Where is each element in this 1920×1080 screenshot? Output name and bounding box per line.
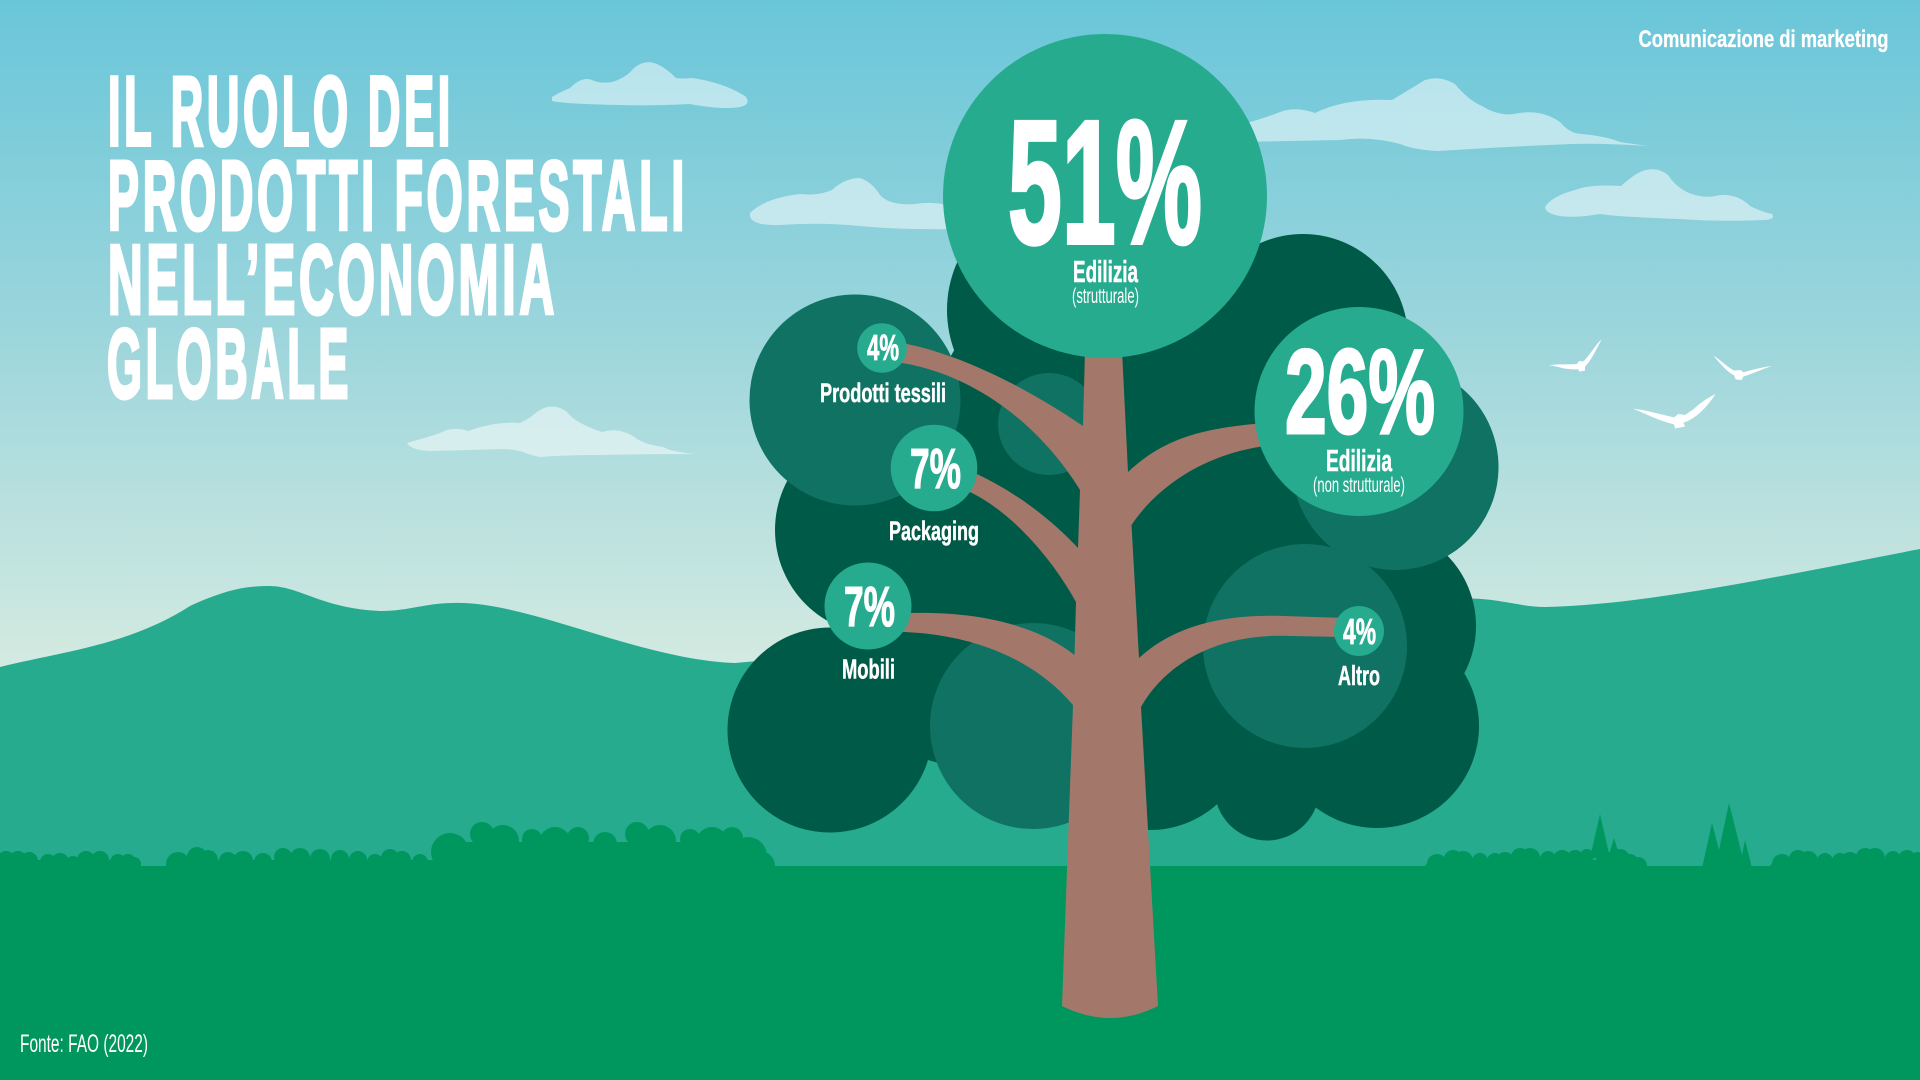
data node: 4% Altro: 4% xyxy=(1343,611,1376,652)
data node: 7% Packaging: Packaging xyxy=(889,516,979,546)
data node: 4% Altro: Altro xyxy=(1338,660,1380,691)
title xyxy=(107,56,688,418)
data node: 7% Packaging: 7% xyxy=(910,437,961,501)
data node: 7% Mobili: 7% xyxy=(844,575,895,639)
ground xyxy=(0,866,1920,1080)
data node: 51% Edilizia strutturale: (strutturale) xyxy=(1072,285,1139,308)
data node: 51% Edilizia strutturale xyxy=(943,34,1267,358)
hills xyxy=(0,549,1920,880)
data node: 4% Prodotti tessili: 4% xyxy=(867,327,899,368)
data node: 7% Packaging xyxy=(889,425,979,546)
data node: 51% Edilizia strutturale: 51% xyxy=(1008,85,1202,281)
data node: 4% Prodotti tessili: Prodotti tessili xyxy=(820,378,946,408)
data node: 4% Altro xyxy=(1334,606,1384,691)
clouds xyxy=(407,62,1773,457)
data node: 26% Edilizia non strutturale: (non strutturale) xyxy=(1313,474,1405,497)
source: Fonte: FAO (2022) xyxy=(20,1030,148,1058)
title: IL RUOLO DEI xyxy=(108,56,454,166)
title: GLOBALE xyxy=(107,308,352,418)
data node: 7% Mobili xyxy=(824,562,912,684)
tree trunk and branches xyxy=(895,342,1345,1018)
data node: 26% Edilizia non strutturale: Edilizia xyxy=(1326,443,1392,478)
data node: 4% Prodotti tessili xyxy=(820,323,946,408)
data node: 7% Mobili: Mobili xyxy=(842,654,895,684)
crown: lighter foliage xyxy=(750,294,1498,829)
infographic: forest products tree illustration: PRODOTTI FORESTALI xyxy=(108,140,688,250)
data node: 26% Edilizia non strutturale: 26% xyxy=(1285,325,1435,459)
bushes and distant trees xyxy=(0,803,1920,881)
birds xyxy=(1548,339,1772,428)
data node: 26% Edilizia non strutturale xyxy=(1254,307,1464,516)
data node: 51% Edilizia strutturale: Edilizia xyxy=(1073,254,1138,289)
crown: dark foliage xyxy=(728,193,1479,840)
tree crown xyxy=(728,193,1498,840)
title: NELL’ECONOMIA xyxy=(108,224,558,334)
